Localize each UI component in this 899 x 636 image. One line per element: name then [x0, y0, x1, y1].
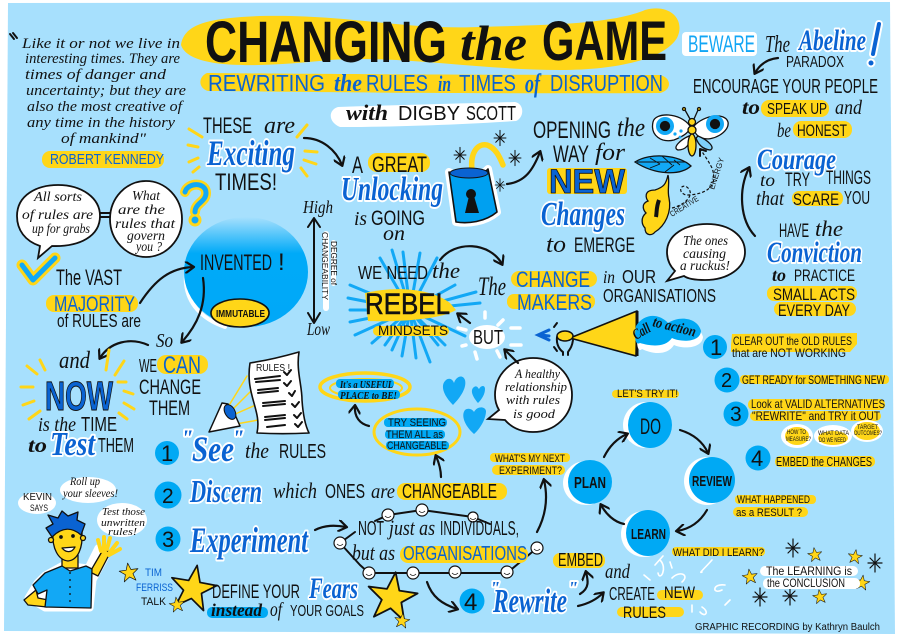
- cycle questions: as a RESULT ?: [736, 507, 802, 519]
- quote: of mankind": [61, 131, 147, 147]
- text: the change makers in our organisations: The: [478, 272, 506, 301]
- cycle: learn: LEARN: [631, 526, 666, 543]
- step 1: see the rules: 1: [161, 441, 173, 466]
- speech: test those unwritten rules: unwritten: [101, 517, 146, 529]
- text: have the conviction: EVERY DAY: [778, 301, 850, 320]
- text: and create new rules: and: [605, 561, 631, 583]
- creative energy dashed arrow: ENERGY: [707, 156, 726, 191]
- step 2: discern: are: [371, 481, 395, 503]
- step 1: see the rules: ": [232, 425, 244, 450]
- callout: useful place: PLACE to BE!: [340, 390, 397, 402]
- subtitle: [200, 69, 669, 98]
- text: define your fears: YOUR GOALS: [290, 603, 364, 620]
- call to action cloud: to action: [651, 314, 698, 341]
- action list item 3: 3: [730, 403, 742, 426]
- quote: times of danger and: [25, 67, 167, 83]
- text: courage to try things: to: [760, 170, 775, 190]
- conclusion stars: [741, 539, 882, 606]
- tim ferriss talk: TALK: [141, 596, 167, 608]
- step 2: discern: CHANGEABLE: [402, 481, 497, 503]
- text: these are exciting times: TIMES!: [215, 169, 277, 196]
- action list item 1: [703, 333, 857, 360]
- step 1: see the rules: See: [192, 429, 234, 469]
- step 3: experiment: [156, 520, 309, 560]
- text: the change makers in our organisations: ORGANISATIONS: [603, 286, 716, 306]
- text: courage to try things: TRY: [785, 170, 810, 191]
- creative energy dashed arrow: [668, 149, 726, 219]
- text: these are exciting times: Exciting: [206, 133, 295, 173]
- speech bubble: the ones causing a ruckus: a ruckus!: [680, 259, 730, 274]
- speech bubbles: rules: All sorts: [33, 190, 83, 205]
- step 4: rewrite: 4: [464, 589, 477, 616]
- step 4: rewrite: ": [490, 578, 500, 598]
- rewrite sub-questions: [781, 420, 883, 448]
- confetti: [644, 556, 730, 615]
- title: CHANGING: [205, 10, 447, 75]
- text: so we can change them: [139, 330, 208, 420]
- rebel burst rays: [348, 250, 480, 362]
- text: define your fears: of: [270, 599, 284, 621]
- callout: try seeing them all: [374, 409, 460, 455]
- callout: try seeing them all: TRY SEEING: [388, 417, 446, 429]
- speech bubble: healthy relationship: is good: [513, 406, 556, 421]
- text: these are exciting times: are: [264, 113, 295, 139]
- speech: roll up your sleeves: Roll up: [69, 474, 100, 488]
- speech bubble: the ones causing a ruckus: [667, 224, 745, 281]
- text: a great unlocking: on: [383, 223, 405, 245]
- arrow: changeable to try seeing: [436, 456, 441, 477]
- text: opening the way: Changes: [541, 196, 625, 233]
- text: encourage your people: [693, 76, 878, 142]
- cycle questions: WHAT HAPPENED: [737, 494, 810, 506]
- quote: any time in the history: [27, 115, 175, 131]
- text: have the conviction: the: [815, 216, 843, 241]
- speech: test those unwritten rules: Test those: [102, 506, 145, 518]
- text: so we can change them: CAN: [163, 352, 201, 379]
- callout: useful place: [320, 373, 410, 402]
- arrow: so to now: [100, 341, 148, 358]
- cycle: review: REVIEW: [692, 473, 733, 490]
- scale: degree of changeability: High: [302, 197, 333, 217]
- text: have the conviction: Conviction: [767, 236, 862, 269]
- presenter banner: SCOTT: [466, 103, 516, 125]
- character: kevin: [24, 511, 120, 608]
- text: have the conviction: [767, 216, 862, 320]
- step 1: see the rules: [155, 425, 326, 469]
- scale: degree of changeability: DEGREE of: [329, 241, 338, 286]
- icon: megaphone and hand: [538, 311, 637, 356]
- stars: define your fears: [118, 561, 420, 628]
- subtitle: TIMES: [459, 70, 516, 96]
- call to action cloud: [630, 314, 703, 353]
- scale: degree of changeability: CHANGEABILITY: [320, 232, 329, 301]
- speech bubbles: rules: of rules are: [22, 208, 93, 223]
- subtitle: REWRITING: [208, 70, 325, 96]
- speech: test those unwritten rules: [97, 503, 147, 538]
- text: these are exciting times: THESE: [203, 113, 252, 138]
- text: beware the abeline paradox: Abeline: [798, 24, 866, 57]
- quote: [10, 33, 186, 147]
- presenter banner: with: [346, 100, 388, 125]
- text: define your fears: DEFINE YOUR: [212, 582, 300, 603]
- cycle: do: [623, 402, 672, 448]
- text: define your fears: instead: [211, 600, 263, 620]
- text: beware the abeline paradox: [682, 24, 879, 71]
- text: encourage your people: be: [777, 120, 791, 142]
- but callout: [458, 312, 521, 359]
- text: so we can change them: WE: [139, 356, 157, 376]
- cycle questions: [490, 388, 816, 559]
- speech: roll up your sleeves: your sleeves!: [62, 486, 118, 500]
- speech bubbles: rules: are the: [118, 203, 165, 218]
- rewrite sub-questions: WHAT DATA: [818, 431, 849, 437]
- step 1: see the rules: ": [181, 425, 193, 450]
- rules checklist paper: RULES !: [256, 363, 290, 374]
- arrow: majority to invented: [140, 267, 193, 303]
- step 3: experiment: Experiment: [189, 520, 309, 560]
- arrow: organisations to rewrite: [427, 582, 457, 609]
- scale: degree of changeability: Low: [306, 319, 330, 339]
- text: courage to try things: that: [756, 188, 784, 210]
- callout: try seeing them all: THEM ALL as: [386, 429, 443, 441]
- speech bubbles: rules: rules that: [115, 217, 176, 232]
- call to action cloud: Call: [630, 320, 654, 343]
- text: these are exciting times: [203, 113, 295, 196]
- arrow: try seeing to useful place: [355, 406, 369, 426]
- arrow: healthy relationship to but: [505, 350, 518, 363]
- network of people: [334, 504, 543, 579]
- text: embed: [553, 550, 605, 570]
- icon: leaf: [635, 156, 691, 235]
- speech bubble: healthy relationship: A healthy: [514, 366, 560, 381]
- text: opening the way: NEW: [549, 163, 626, 201]
- action list item 4: 4: [751, 446, 763, 471]
- text: and now is the time to test them: and: [59, 348, 91, 374]
- step 2: discern: [154, 473, 507, 509]
- text: have the conviction: to: [772, 265, 786, 285]
- callout: try seeing them all: CHANGEABLE: [387, 440, 447, 452]
- step 4: rewrite: [460, 578, 578, 620]
- text: so we can change them: So: [156, 330, 173, 352]
- text: the change makers in our organisations: CHANGE: [516, 267, 590, 292]
- circle: invented: !: [278, 249, 285, 276]
- text: and create new rules: [605, 561, 703, 622]
- quote: interesting times. They are: [25, 51, 180, 67]
- rewrite sub-questions: HOW TO: [787, 430, 806, 436]
- text: so we can change them: THEM: [149, 397, 190, 420]
- action list item 4: [746, 446, 875, 471]
- cycle questions: EXPERIMENT?: [499, 465, 562, 477]
- icon: butterfly: [653, 108, 728, 156]
- cycle questions: LET'S TRY IT!: [617, 388, 678, 400]
- text: vast majority of rules: of RULES are: [57, 311, 141, 331]
- creative energy dashed arrow: CREATIVE: [668, 194, 700, 219]
- circle: invented: [184, 217, 308, 327]
- cycle: plan: PLAN: [574, 475, 606, 492]
- text: not just as individuals but as organisations: ORGANISATIONS: [403, 543, 527, 565]
- text: we need the rebel mindsets: WE NEED: [358, 263, 428, 283]
- speech bubbles: rules: you ?: [134, 240, 162, 255]
- text: not just as individuals but as organisations: INDIVIDUALS,: [440, 518, 519, 540]
- text: beware the abeline paradox: BEWARE: [688, 31, 755, 58]
- title: the: [460, 15, 527, 71]
- step 2: discern: Discern: [189, 473, 262, 509]
- text: a great unlocking: Unlocking: [341, 171, 443, 208]
- text: and create new rules: CREATE: [609, 584, 655, 604]
- step 1: see the rules: the: [245, 438, 269, 463]
- action list item 1: that are NOT WORKING: [732, 346, 846, 360]
- scale: degree of changeability: [302, 197, 338, 339]
- step 2: discern: ONES: [325, 481, 365, 503]
- action list item 2: 2: [721, 370, 732, 392]
- text: and now is the time to test them: is the: [38, 414, 76, 436]
- text: courage to try things: Courage: [757, 143, 836, 176]
- text: and now is the time to test them: THEM: [98, 435, 134, 457]
- quote: also the most creative of: [27, 99, 184, 115]
- speech bubble: healthy relationship: [488, 358, 572, 432]
- text: opening the way: the: [617, 113, 645, 142]
- text: encourage your people: HONEST: [797, 121, 847, 140]
- kevin says: [18, 492, 56, 514]
- text: encourage your people: SPEAK UP: [767, 101, 827, 118]
- but callout: BUT: [473, 327, 503, 349]
- text: a great unlocking: GREAT: [372, 152, 427, 177]
- immutable badge: [211, 299, 269, 327]
- cycle questions: WHAT DID I LEARN?: [673, 547, 764, 559]
- text: courage to try things: THINGS: [826, 168, 871, 189]
- arrow: paradox: [755, 58, 778, 73]
- arrow: experiment to network: [315, 526, 346, 530]
- quote: uncertainty; but they are: [26, 83, 186, 99]
- rays around exciting: [188, 125, 317, 176]
- text: opening the way: OPENING: [533, 117, 611, 144]
- text: a great unlocking: A: [352, 152, 363, 179]
- circle: invented: INVENTED: [200, 250, 272, 275]
- presenter banner: DIGBY: [398, 103, 460, 125]
- rewrite sub-questions: OUTCOMES?: [854, 431, 882, 437]
- title: GAME: [542, 9, 667, 72]
- text: not just as individuals but as organisations: NOT: [358, 518, 384, 540]
- speech bubble: the ones causing a ruckus: The ones: [683, 234, 728, 249]
- text: not just as individuals but as organisations: just as: [387, 515, 435, 540]
- icon: hearts: [443, 376, 486, 434]
- arrow: rewrite to embed: [580, 572, 588, 594]
- speech bubble: the ones causing a ruckus: causing: [683, 247, 726, 262]
- speech bubbles: rules: What: [132, 189, 161, 204]
- kevin says: KEVIN: [23, 492, 52, 503]
- icon: question mark: [185, 185, 206, 226]
- text: embed: EMBED: [558, 550, 603, 570]
- action list item 3: [724, 397, 885, 426]
- quote: Like it or not we live in: [21, 36, 180, 52]
- text: vast majority of rules: The VAST: [56, 265, 122, 290]
- arrow: conviction to courage: [742, 168, 755, 236]
- step 4: rewrite: Rewrite: [492, 583, 567, 620]
- arrow: but to rebel: [458, 314, 470, 323]
- text: we need the rebel mindsets: the: [432, 258, 460, 283]
- text: and now is the time to test them: NOW: [45, 373, 113, 419]
- cycle questions: WHAT'S MY NEXT: [495, 453, 565, 465]
- step 1: see the rules: RULES: [279, 441, 326, 463]
- text: a great unlocking: is: [354, 208, 367, 230]
- callout: useful place: It's a USEFUL: [339, 379, 393, 391]
- cycle: do: DO: [640, 414, 661, 439]
- arrow: exciting to great unlocking: [304, 138, 342, 165]
- action list item 2: [714, 368, 889, 392]
- subtitle: DISRUPTION: [550, 70, 663, 96]
- cycle arrows: [601, 430, 708, 531]
- text: define your fears: Fears: [308, 572, 358, 605]
- speech bubble: healthy relationship: relationship: [505, 379, 567, 394]
- rewrite sub-questions: TARGET: [857, 425, 878, 431]
- text: opening the way: WAY: [553, 141, 589, 168]
- action list item 1: 1: [710, 335, 722, 360]
- text: not just as individuals but as organisations: but as: [352, 540, 395, 565]
- text: the change makers in our organisations: MAKERS: [517, 290, 592, 315]
- arrow: rewrite up to experiment: [537, 480, 546, 532]
- subtitle: RULES: [366, 70, 428, 96]
- text: opening the way: EMERGE: [574, 234, 635, 257]
- text: encourage your people: and: [835, 97, 863, 119]
- rewrite sub-questions: MEASURE?: [786, 437, 811, 443]
- text: the learning is the conclusion: the CONCLUSION: [767, 576, 845, 590]
- credit: GRAPHIC RECORDING by Kathryn Baulch: [695, 622, 880, 633]
- action list item 1: CLEAR OUT the OLD RULES: [733, 334, 852, 348]
- tim ferriss talk: FERRISS: [136, 582, 173, 594]
- subtitle: in: [438, 71, 451, 96]
- icon: check mark: [22, 258, 55, 280]
- icon: padlock: [449, 130, 521, 223]
- text: opening the way: for: [595, 140, 626, 166]
- title: [181, 8, 680, 75]
- text: encourage your people: to: [742, 97, 760, 119]
- text: courage to try things: SCARE: [793, 190, 839, 209]
- tim ferriss talk: [136, 567, 173, 608]
- text: the change makers in our organisations: in: [603, 267, 615, 287]
- text: we need the rebel mindsets: MINDSETS: [378, 322, 448, 338]
- text: a great unlocking: GOING: [371, 207, 425, 230]
- text: the learning is the conclusion: [760, 564, 860, 590]
- subtitle: the: [334, 71, 362, 97]
- speech: roll up your sleeves: [60, 474, 118, 503]
- text: and now is the time to test them: TIME: [81, 414, 117, 436]
- immutable badge: IMMUTABLE: [216, 308, 265, 320]
- text: opening the way: [533, 113, 645, 258]
- rules checklist paper: [249, 352, 309, 434]
- text: vast majority of rules: [46, 265, 141, 331]
- text: have the conviction: PRACTICE: [794, 266, 855, 285]
- speech bubble: healthy relationship: with rules: [506, 392, 560, 407]
- arrow: rebel to change makers: [440, 246, 502, 264]
- subtitle: of: [525, 69, 542, 98]
- speech: test those unwritten rules: rules!: [108, 526, 137, 538]
- text: and now is the time to test them: [28, 348, 134, 463]
- text: not just as individuals but as organisations: [352, 515, 528, 565]
- text: and now is the time to test them: Test: [50, 426, 96, 463]
- text: we need the rebel mindsets: [358, 258, 460, 338]
- text: beware the abeline paradox: The: [765, 32, 790, 58]
- text: the change makers in our organisations: OUR: [622, 267, 656, 287]
- cycle: plan: [563, 460, 612, 505]
- text: so we can change them: CHANGE: [139, 376, 201, 399]
- step 4: rewrite: ": [568, 578, 578, 598]
- text: the change makers in our organisations: [478, 267, 716, 315]
- text: and create new rules: RULES: [623, 603, 666, 622]
- text: we need the rebel mindsets: REBEL: [365, 288, 450, 321]
- kevin says: SAYS: [30, 503, 48, 513]
- step 2: discern: 2: [162, 485, 174, 508]
- speech bubbles: rules: up for grabs: [32, 222, 90, 237]
- text: beware the abeline paradox: PARADOX: [786, 54, 844, 71]
- rewrite sub-questions: DO WE NEED: [819, 438, 846, 444]
- speech bubbles: rules: [17, 181, 182, 258]
- tim ferriss talk: TIM: [145, 567, 162, 579]
- text: define your fears: [207, 572, 364, 621]
- cycle: learn: [621, 510, 670, 557]
- text: opening the way: to: [546, 232, 566, 258]
- text: a great unlocking: [341, 152, 443, 245]
- quote attribution: ROBERT KENNEDY: [50, 151, 164, 168]
- rays around now: [21, 350, 134, 419]
- text: have the conviction: HAVE: [779, 221, 809, 242]
- text: and create new rules: NEW: [664, 583, 695, 602]
- text: and now is the time to test them: to: [28, 435, 47, 457]
- arrow: unlock to opening: [507, 152, 540, 184]
- text: the learning is the conclusion: The LEARNING is: [766, 564, 852, 578]
- icon: eye with sight rays: [209, 376, 275, 432]
- speech bubbles: rules: govern: [127, 229, 165, 244]
- cycle: review: [684, 457, 735, 505]
- text: have the conviction: SMALL ACTS: [773, 285, 855, 304]
- arrow: rewrite to create: [578, 593, 603, 606]
- step 2: discern: which: [273, 478, 317, 503]
- step 3: experiment: 3: [162, 527, 174, 552]
- arrow: invented to so we can: [182, 278, 204, 342]
- text: vast majority of rules: MAJORITY: [54, 293, 135, 316]
- text: courage to try things: YOU: [844, 188, 870, 208]
- text: courage to try things: [756, 143, 871, 210]
- presenter banner: [331, 100, 522, 127]
